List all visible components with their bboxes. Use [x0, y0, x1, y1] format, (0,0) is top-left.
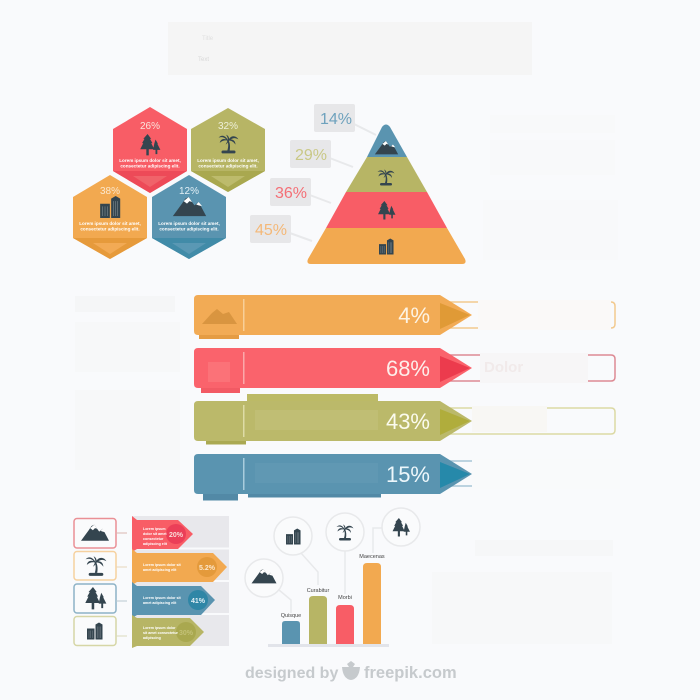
pyramid band: red: [326, 192, 447, 228]
hexagon: blue 12%: consectetur adipiscing elit.: [159, 226, 219, 232]
pyramid band: blue: [367, 124, 407, 157]
hexagon: red 26%: Lorem ipsum dolor sit amet,: [119, 158, 181, 163]
chart: bar chart: [245, 508, 420, 647]
row: red: dolor sit amet: [143, 532, 167, 536]
bar: blue 15%: [194, 454, 620, 500]
pyramid band: orange: [307, 228, 466, 264]
label: 36%: [270, 178, 311, 206]
bar: blue 15%: 15%: [386, 462, 430, 487]
row: red: [74, 516, 193, 552]
row: red: consectetur: [143, 537, 164, 541]
row: blue: Lorem ipsum dolor sit: [143, 596, 182, 600]
label: 45%: 45%: [255, 222, 287, 239]
row: orange: [74, 549, 227, 585]
title panel: Text: [198, 57, 209, 63]
icon circle: palm: [326, 513, 364, 551]
bar: olive 43%: [194, 394, 615, 444]
row: orange: 5.2%: [199, 565, 216, 572]
row: orange: Lorem ipsum dolor sit: [143, 563, 182, 567]
hexagon: red 26%: [113, 107, 187, 193]
row: olive: [74, 615, 204, 648]
row: blue: 41%: [191, 598, 206, 605]
title panel: [168, 22, 532, 75]
hexagon: blue 12%: Lorem ipsum dolor sit amet,: [158, 221, 220, 226]
title panel: Title: [202, 36, 214, 42]
bar: olive 43%: 43%: [386, 409, 430, 434]
bar: Curabitur: Curabitur: [307, 588, 329, 594]
label: 45%: [250, 215, 291, 243]
row: red: 20%: [169, 532, 184, 539]
bar: Quisque: Quisque: [281, 613, 301, 619]
text block: left of bars: [75, 296, 180, 470]
text block: bottom right: [432, 540, 613, 644]
icon circle: mountain: [245, 559, 283, 597]
row: olive: Lorem ipsum dolor: [143, 626, 176, 630]
row: red: adipiscing elit: [143, 542, 168, 546]
bar: orange 4%: [194, 295, 615, 339]
hexagon: orange 38%: Lorem ipsum dolor sit amet,: [79, 221, 141, 226]
bar: Curabitur: [307, 588, 329, 644]
panel: hexagons: [73, 107, 265, 259]
icon circle: trees: [382, 508, 420, 546]
bar: Morbi: [336, 595, 354, 644]
hexagon: blue 12%: 12%: [179, 186, 199, 197]
bar: Quisque: [281, 613, 301, 644]
label connectors: [287, 122, 376, 241]
row: red: Lorem ipsum: [143, 527, 166, 531]
bar: Maecenas: Maecenas: [359, 554, 385, 560]
icon: palm: [378, 170, 394, 186]
panel: progress bars: [194, 295, 620, 500]
row: olive: sit amet consectetur: [143, 631, 179, 635]
hexagon: olive 32%: 32%: [218, 121, 238, 132]
footer credit: designed by: [245, 665, 338, 682]
connectors: [279, 528, 383, 613]
bar: red 68%: [194, 348, 615, 393]
hexagon: orange 38%: [73, 175, 147, 259]
icon circle: building: [274, 517, 312, 555]
hexagon: red 26%: consectetur adipiscing elit.: [120, 164, 180, 168]
hexagon: orange 38%: consectetur adipiscing elit.: [80, 226, 140, 232]
bar: orange 4%: 4%: [398, 303, 430, 328]
pyramid band: olive: [346, 157, 427, 192]
baseline: [268, 644, 389, 647]
bar: Morbi: Morbi: [338, 595, 352, 601]
hexagon: orange 38%: 38%: [100, 186, 120, 197]
hexagon: olive 32%: Lorem ipsum dolor sit amet,: [197, 158, 259, 163]
hexagon: blue 12%: [152, 175, 226, 259]
list backing panel: [132, 516, 229, 646]
bar: Maecenas: [359, 554, 385, 644]
hexagon: olive 32%: [191, 108, 265, 192]
row: orange: amet adipiscing elit: [143, 568, 177, 572]
label: 36%: 36%: [275, 185, 307, 202]
row: blue: amet adipiscing elit: [143, 601, 177, 605]
chart: pyramid: [250, 104, 466, 264]
bar: red 68%: Dolor: [484, 359, 523, 376]
icon: mountain: [375, 141, 398, 154]
row: blue: [74, 582, 215, 618]
row: olive: adipiscing: [143, 636, 161, 640]
panel: icon list: [74, 516, 229, 648]
bar: red 68%: 68%: [386, 356, 430, 381]
hexagon: olive 32%: consectetur adipiscing elit.: [198, 164, 258, 168]
gaps between rows: [132, 548, 229, 614]
icon: building: [379, 239, 394, 254]
label: 14%: [314, 104, 355, 132]
footer credit: freepik.com: [364, 664, 457, 682]
label: 29%: [290, 140, 331, 168]
hexagon: red 26%: 26%: [140, 121, 160, 132]
label: 29%: 29%: [295, 147, 327, 164]
text block: right of pyramid: [483, 115, 618, 260]
row: olive: 30%: [179, 630, 194, 637]
label: 14%: 14%: [320, 111, 352, 128]
icon: tree: [378, 201, 395, 219]
footer credit: [245, 661, 457, 682]
